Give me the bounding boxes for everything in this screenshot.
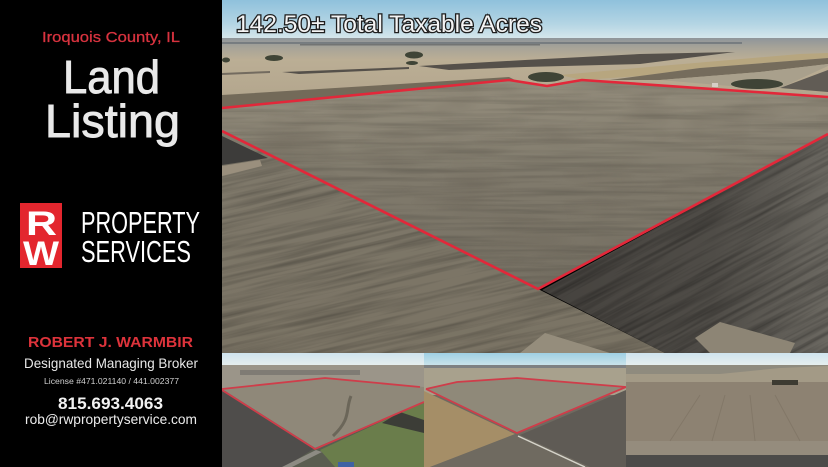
contact block [24, 334, 198, 427]
logo: RW property services: W [23, 235, 60, 273]
red parcel boundary [222, 80, 828, 289]
heading: land listing: Land [63, 51, 160, 103]
contact block: rob@rwpropertyservice.com [25, 411, 197, 427]
heading: land listing [45, 51, 180, 147]
right dark field [542, 134, 828, 353]
logo: RW property services [20, 203, 200, 273]
parcel field [222, 80, 828, 289]
main aerial photo [222, 0, 828, 353]
heading: county: Iroquois County, IL [42, 29, 180, 46]
thumbnail photo 2 [424, 353, 626, 467]
thumbnail photo 3 [626, 353, 828, 467]
contact block: License #471.021140 / 441.002377 [44, 376, 179, 386]
contact block: ROBERT J. WARMBIR [28, 334, 193, 351]
far tree clusters [222, 52, 783, 89]
contact block: 815.693.4063 [58, 394, 163, 413]
thumbnail photo 1 [222, 353, 424, 467]
heading: land listing: Listing [45, 95, 180, 147]
logo: RW property services: R [26, 205, 57, 243]
contact block: Designated Managing Broker [24, 355, 198, 371]
far dark field strips [222, 52, 735, 75]
panel: black sidebar [0, 0, 222, 467]
logo: RW property services: SERVICES [81, 234, 191, 269]
logo: RW property services: PROPERTY [81, 205, 200, 240]
title: total taxable acres: 142.50± Total Taxable Acres [236, 11, 542, 38]
left lower field [222, 131, 665, 353]
